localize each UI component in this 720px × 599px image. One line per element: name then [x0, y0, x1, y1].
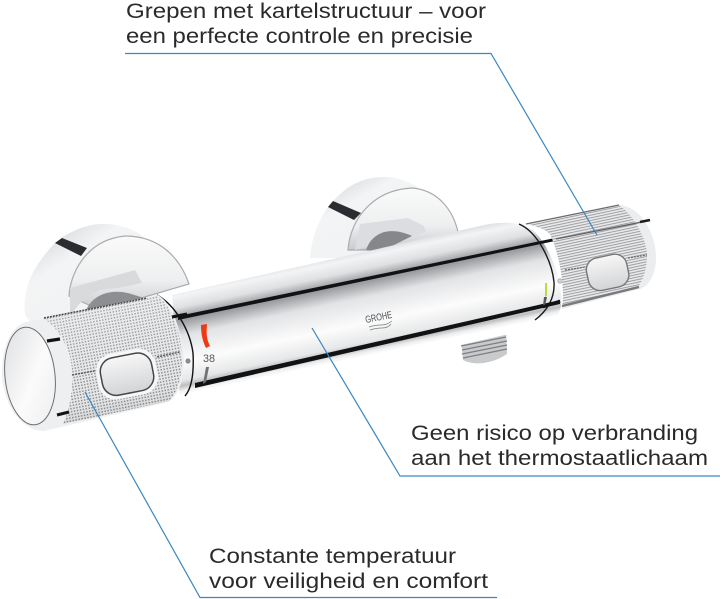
- left knob end cap: [0, 325, 60, 427]
- red temperature mark: [201, 324, 210, 348]
- right knob: [525, 205, 656, 309]
- callout: temperature: Constante temperatuur: [209, 544, 456, 568]
- callout: grips: [125, 0, 597, 235]
- callout: burn risk: Geen risico op verbranding: [411, 421, 698, 445]
- wall plate: left: [24, 224, 189, 330]
- callout: burn risk: aan het thermostaatlichaam: [411, 446, 708, 470]
- left knob: [0, 295, 187, 431]
- callout: burn risk: [312, 328, 720, 476]
- callout: temperature: [85, 392, 497, 598]
- left knob button: [93, 346, 161, 402]
- shower outlet connector: [458, 322, 507, 363]
- logo: GROHE: GROHE: [364, 310, 393, 326]
- thermostat body: [157, 223, 562, 402]
- callout: grips: een perfecte controle en precisie: [126, 24, 473, 48]
- 38 temperature label: 38: [203, 353, 215, 365]
- right knob button: [584, 252, 631, 293]
- logo: GROHE: [364, 310, 393, 330]
- green temperature mark: [545, 283, 547, 297]
- callout: temperature: voor veiligheid en comfort: [209, 569, 488, 593]
- wall plate: right: [310, 177, 458, 258]
